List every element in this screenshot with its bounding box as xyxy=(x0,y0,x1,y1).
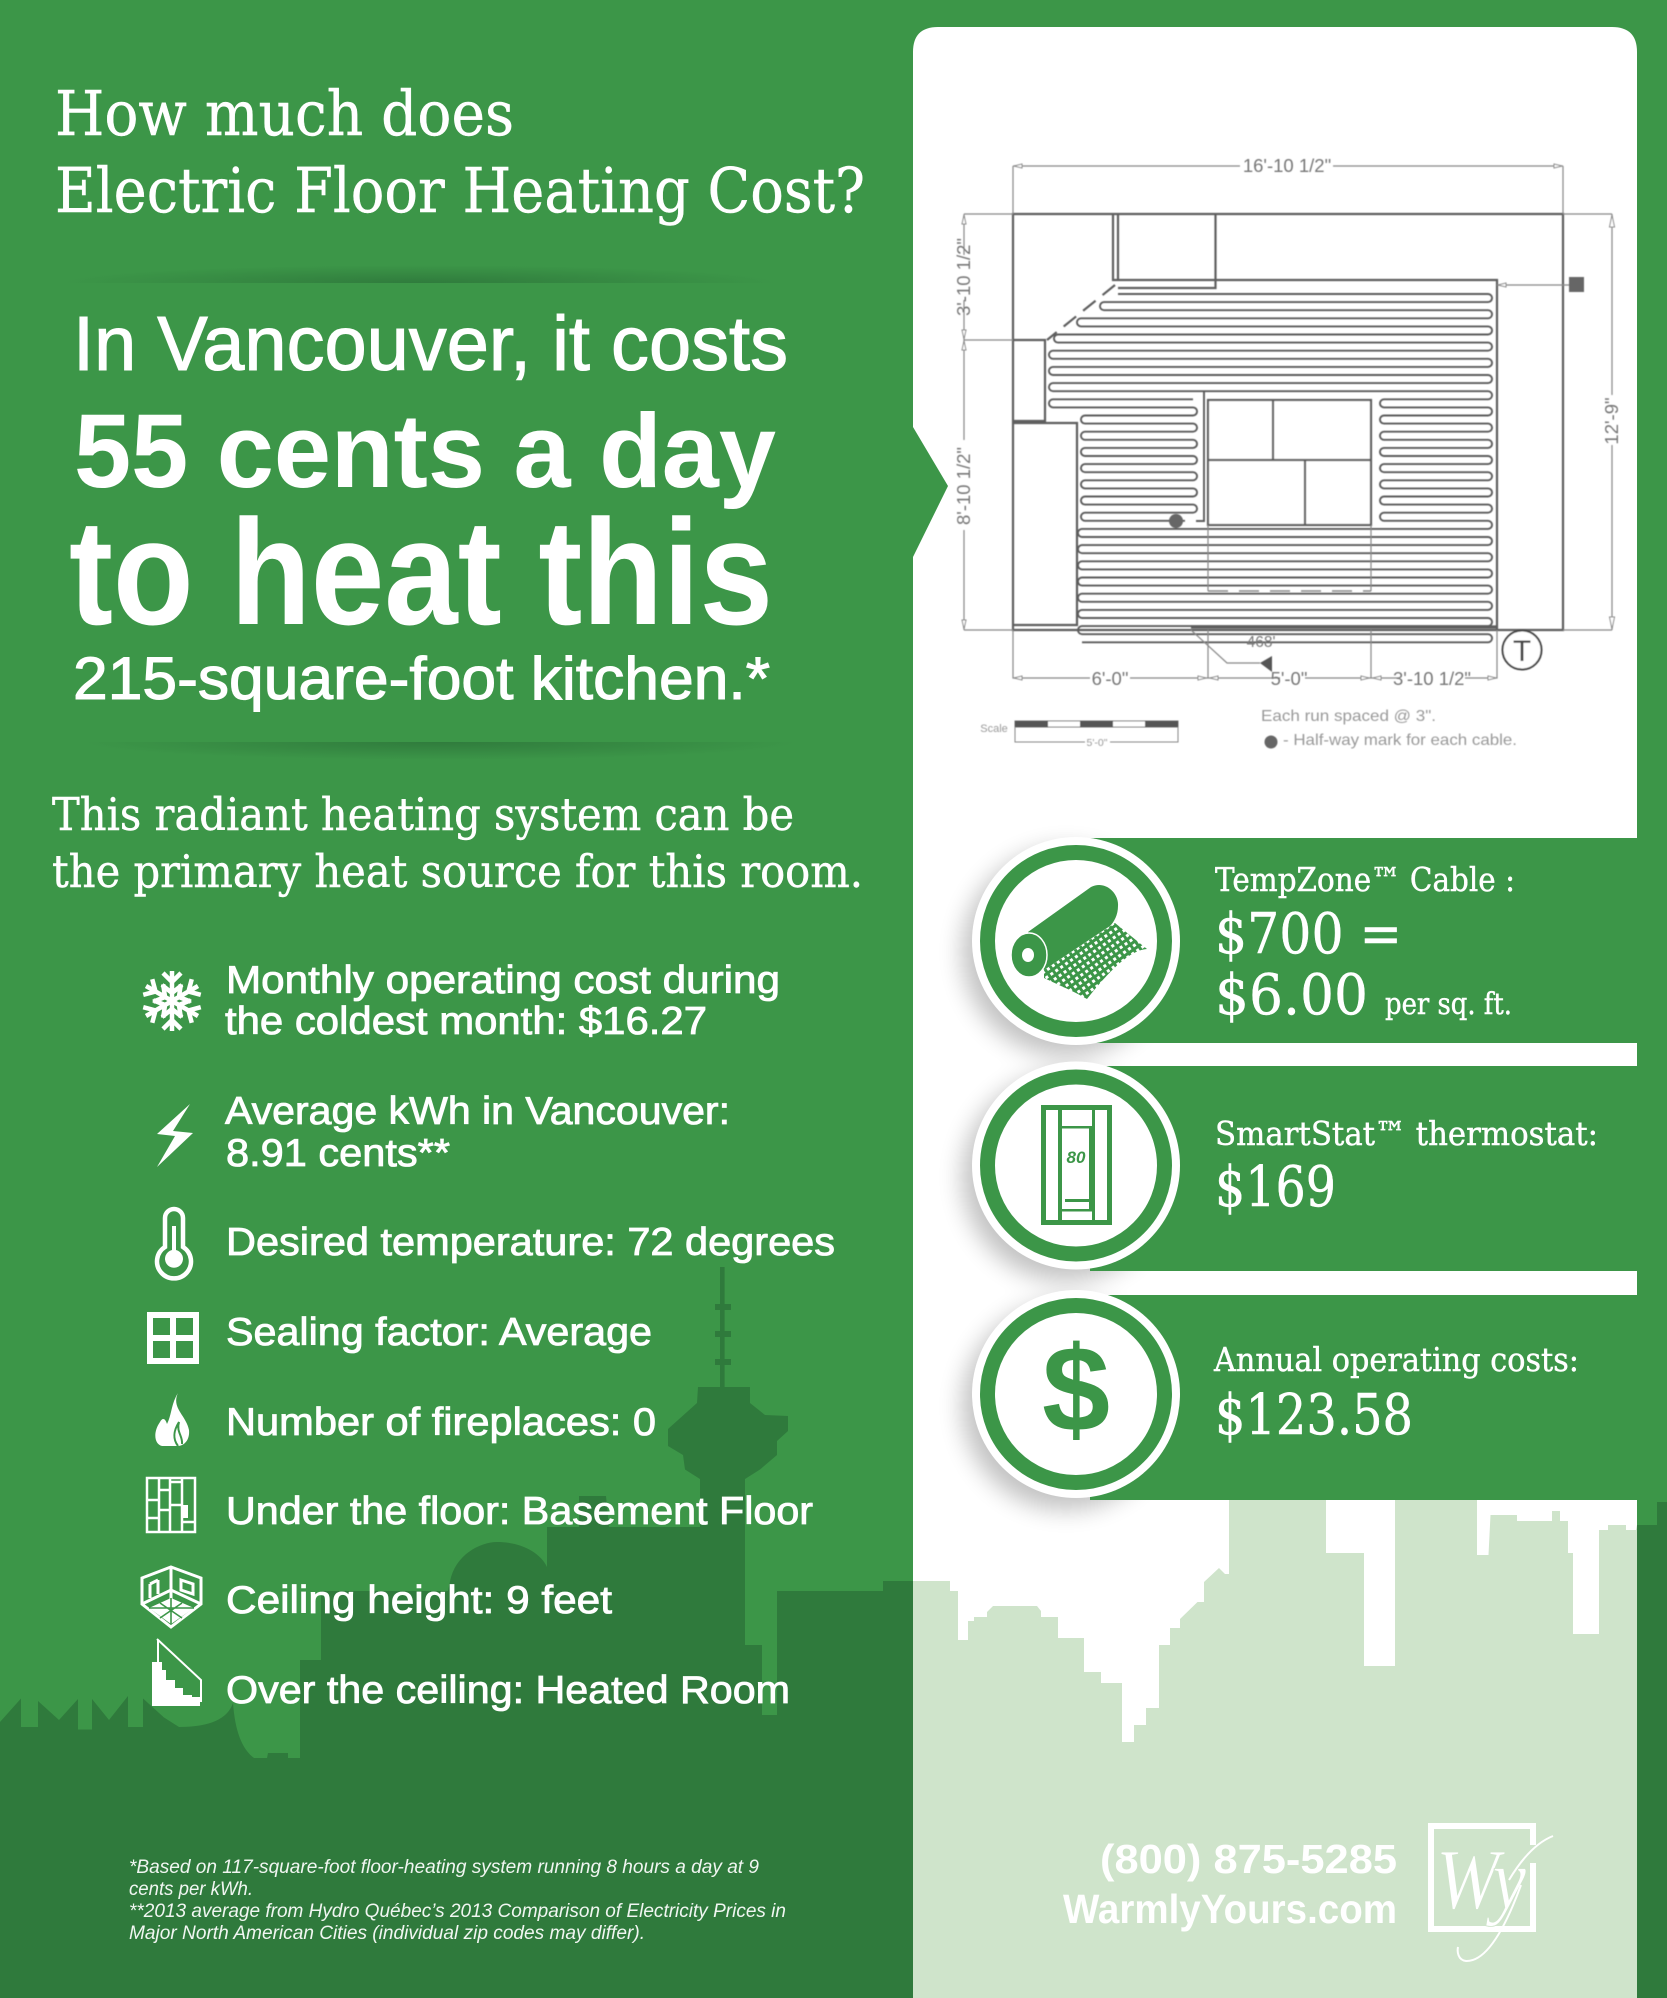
text: TempZone cable cost: per sq. ft. xyxy=(1385,987,1512,1022)
text: TempZone cable cost xyxy=(1215,860,1515,1028)
floor plan drawing xyxy=(953,155,1622,749)
icon badge: dollar: $ xyxy=(1042,1321,1110,1457)
icon: snowflake xyxy=(141,971,203,1031)
dark city skyline with Vancouver tower xyxy=(0,1267,1667,1998)
plan notes xyxy=(1261,708,1517,749)
icon: lightning bolt xyxy=(157,1104,193,1167)
details list: Number of fireplaces: 0 xyxy=(226,1401,656,1444)
dimension labels: 8'-10 1/2" xyxy=(953,447,974,525)
text: thermostat cost: SmartStat™ thermostat: xyxy=(1215,1114,1598,1153)
divider shadow top xyxy=(171,270,670,283)
icon: room corner xyxy=(142,1567,201,1627)
subheading: This radiant heating system can be xyxy=(52,788,794,841)
icon badge: dollar xyxy=(972,1290,1180,1498)
dimension labels: 5'-0" xyxy=(1271,668,1307,689)
contact details: (800) 875-5285 xyxy=(1100,1836,1397,1882)
text: TempZone cable cost: $700 = xyxy=(1215,902,1402,967)
subheading xyxy=(52,788,863,898)
dimension labels xyxy=(953,155,1622,689)
details list xyxy=(225,959,835,1712)
icon: thermometer xyxy=(157,1209,191,1278)
headline: to heat this xyxy=(69,488,773,656)
footnote: cents per kWh. xyxy=(129,1878,253,1900)
scale bar xyxy=(980,721,1178,749)
footnote xyxy=(129,1856,786,1944)
heating cable runs xyxy=(1049,294,1492,642)
logo: WarmlyYours monogram: Wy xyxy=(1436,1831,1527,1927)
scale bar: Scale xyxy=(980,723,1008,735)
dimension labels: 12'-9" xyxy=(1601,397,1622,445)
details list: Sealing factor: Average xyxy=(226,1311,652,1354)
title: How much does xyxy=(55,77,514,150)
footnote: Major North American Cities (individual zip codes may differ). xyxy=(129,1922,645,1944)
halfway mark dot xyxy=(1169,514,1183,528)
panel: annual operating costs band xyxy=(972,1290,1637,1500)
title: Electric Floor Heating Cost? xyxy=(55,154,865,227)
text: thermostat cost: $169 xyxy=(1215,1155,1336,1220)
contact details: WarmlyYours.com xyxy=(1063,1886,1397,1932)
headline: 55 cents a day xyxy=(74,393,776,510)
panel: white floor plan panel with arrow notch xyxy=(913,27,1637,1998)
icon: stairs xyxy=(152,1639,201,1706)
divider shadow bottom xyxy=(190,742,690,754)
dimension labels: 6'-0" xyxy=(1092,668,1128,689)
text: TempZone cable cost: TempZone™ Cable : xyxy=(1215,860,1515,899)
leader arrow xyxy=(1260,656,1272,672)
pale skyline footer xyxy=(913,1500,1637,1998)
details list: Ceiling height: 9 feet xyxy=(226,1579,612,1622)
headline: 215-square-foot kitchen.* xyxy=(73,645,770,712)
headline xyxy=(69,301,788,712)
dimension lines xyxy=(964,166,1612,678)
headline: In Vancouver, it costs xyxy=(73,301,788,387)
walls and cabinets xyxy=(1013,214,1563,630)
text: annual cost xyxy=(1213,1340,1579,1448)
panel: TempZone cable band xyxy=(972,837,1637,1045)
scale bar: 5'-0" xyxy=(1087,737,1108,749)
details list: Desired temperature: 72 degrees xyxy=(226,1221,835,1264)
logo: WarmlyYours monogram xyxy=(1431,1826,1553,1961)
icon: window xyxy=(150,1315,196,1361)
dimension labels: 16'-10 1/2" xyxy=(1243,155,1331,176)
thermostat sensor square xyxy=(1569,277,1584,292)
details list: 8.91 cents** xyxy=(226,1132,450,1175)
icon badge: cable roll xyxy=(972,837,1180,1045)
details list: Under the floor: Basement Floor xyxy=(226,1490,813,1533)
footnote: *Based on 117-square-foot floor-heating system running 8 hours a day at 9 xyxy=(129,1856,759,1878)
thermostat T marker: T xyxy=(1513,635,1531,668)
text: annual cost: Annual operating costs: xyxy=(1213,1340,1579,1379)
text: thermostat cost xyxy=(1215,1114,1598,1220)
dimension arrowheads xyxy=(962,164,1614,680)
icon badge: thermostat: 80 xyxy=(1067,1148,1086,1167)
dimension labels: 3'-10 1/2" xyxy=(953,238,974,316)
plan notes: - Half-way mark for each cable. xyxy=(1283,732,1517,749)
dimension labels: 468' xyxy=(1247,634,1275,651)
plan notes: Each run spaced @ 3". xyxy=(1261,708,1436,725)
details list: Over the ceiling: Heated Room xyxy=(226,1669,790,1712)
details list: Monthly operating cost during xyxy=(226,959,780,1002)
island xyxy=(1208,400,1371,591)
details list: Average kWh in Vancouver: xyxy=(225,1090,730,1133)
details list: the coldest month: $16.27 xyxy=(225,1000,707,1043)
text: annual cost: $123.58 xyxy=(1215,1383,1413,1448)
icon badge: thermostat xyxy=(972,1062,1180,1270)
icon: thermometer mercury xyxy=(165,1226,183,1268)
dimension labels: 3'-10 1/2" xyxy=(1393,668,1471,689)
thermostat T marker xyxy=(1502,630,1542,670)
icon: floor boards xyxy=(147,1478,195,1532)
panel: SmartStat thermostat band xyxy=(972,1062,1637,1271)
text: TempZone cable cost: $6.00 xyxy=(1215,963,1368,1028)
title xyxy=(55,77,865,227)
contact details xyxy=(1063,1836,1397,1932)
subheading: the primary heat source for this room. xyxy=(52,845,863,898)
footnote: **2013 average from Hydro Québec’s 2013 Comparison of Electricity Prices in xyxy=(129,1900,786,1922)
circle drop shadows xyxy=(962,848,1170,1510)
icon: flame xyxy=(155,1393,189,1446)
